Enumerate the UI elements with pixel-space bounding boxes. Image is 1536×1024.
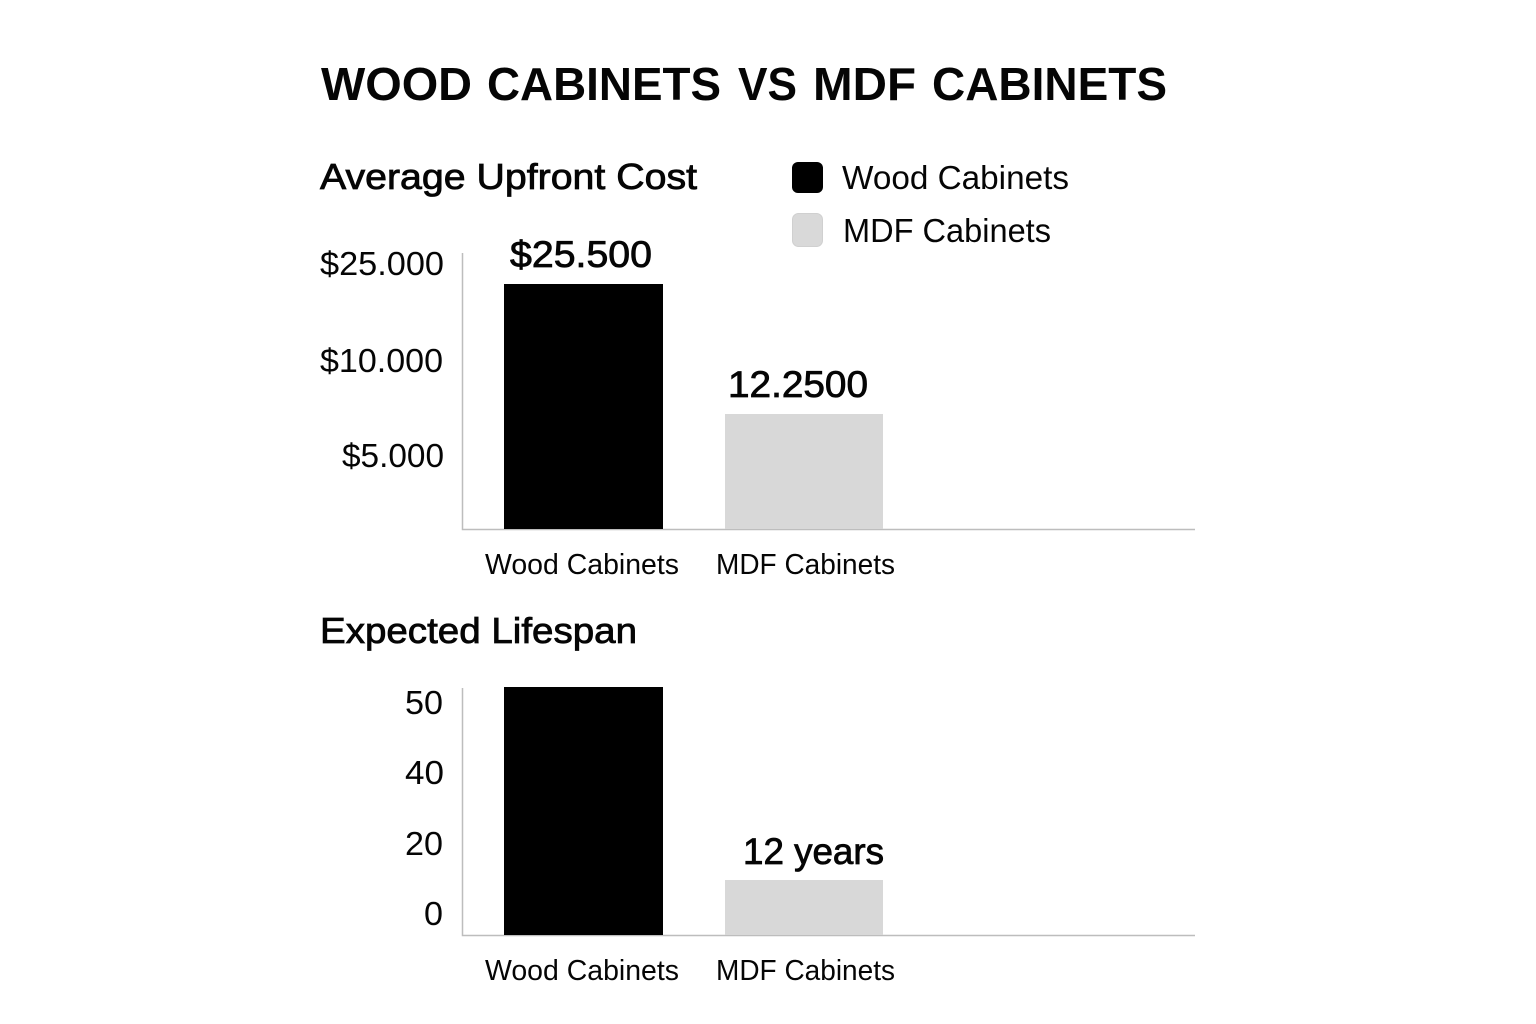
bar: wood cost: [504, 284, 663, 529]
bar: MDF lifespan: [725, 880, 883, 935]
title: MDF: [813, 58, 916, 110]
legend swatch: wood: [792, 162, 823, 193]
panel: average upfront cost: [320, 156, 1195, 581]
bar: wood lifespan: [504, 687, 663, 935]
y axis labels: [405, 684, 444, 932]
y axis labels: $25.000: [320, 245, 444, 282]
heading: expected lifespan: Expected Lifespan: [320, 610, 637, 651]
title: [321, 58, 1167, 110]
y axis labels: $5.000: [342, 437, 444, 474]
x label: wood: Wood Cabinets: [485, 955, 679, 987]
title: VS: [738, 58, 797, 110]
y axis labels: $10.000: [320, 342, 443, 379]
heading: average upfront cost: Average Upfront Cost: [320, 156, 697, 197]
bar: MDF cost: [725, 414, 883, 529]
legend label: MDF: MDF Cabinets: [843, 212, 1051, 249]
y axis labels: 40: [405, 754, 444, 791]
panel: expected lifespan: [320, 610, 1195, 987]
legend: [792, 159, 1069, 249]
value: MDF cost: 12.2500: [728, 364, 868, 405]
legend label: wood: Wood Cabinets: [842, 159, 1069, 196]
x label: MDF: MDF Cabinets: [716, 549, 895, 581]
x label: wood: Wood Cabinets: [485, 549, 679, 581]
title: CABINETS: [487, 58, 721, 110]
y axis labels: [320, 245, 444, 474]
value: wood cost: $25.500: [510, 234, 652, 275]
value: MDF lifespan: 12 years: [743, 831, 884, 872]
axes: [462, 253, 1195, 530]
title: WOOD: [321, 58, 472, 110]
title: CABINETS: [932, 58, 1167, 110]
x label: MDF: MDF Cabinets: [716, 955, 895, 987]
y axis labels: 0: [424, 895, 443, 932]
legend swatch: MDF: [792, 214, 822, 246]
y axis labels: 50: [405, 684, 443, 721]
y axis labels: 20: [405, 825, 443, 862]
axes: [462, 688, 1195, 936]
